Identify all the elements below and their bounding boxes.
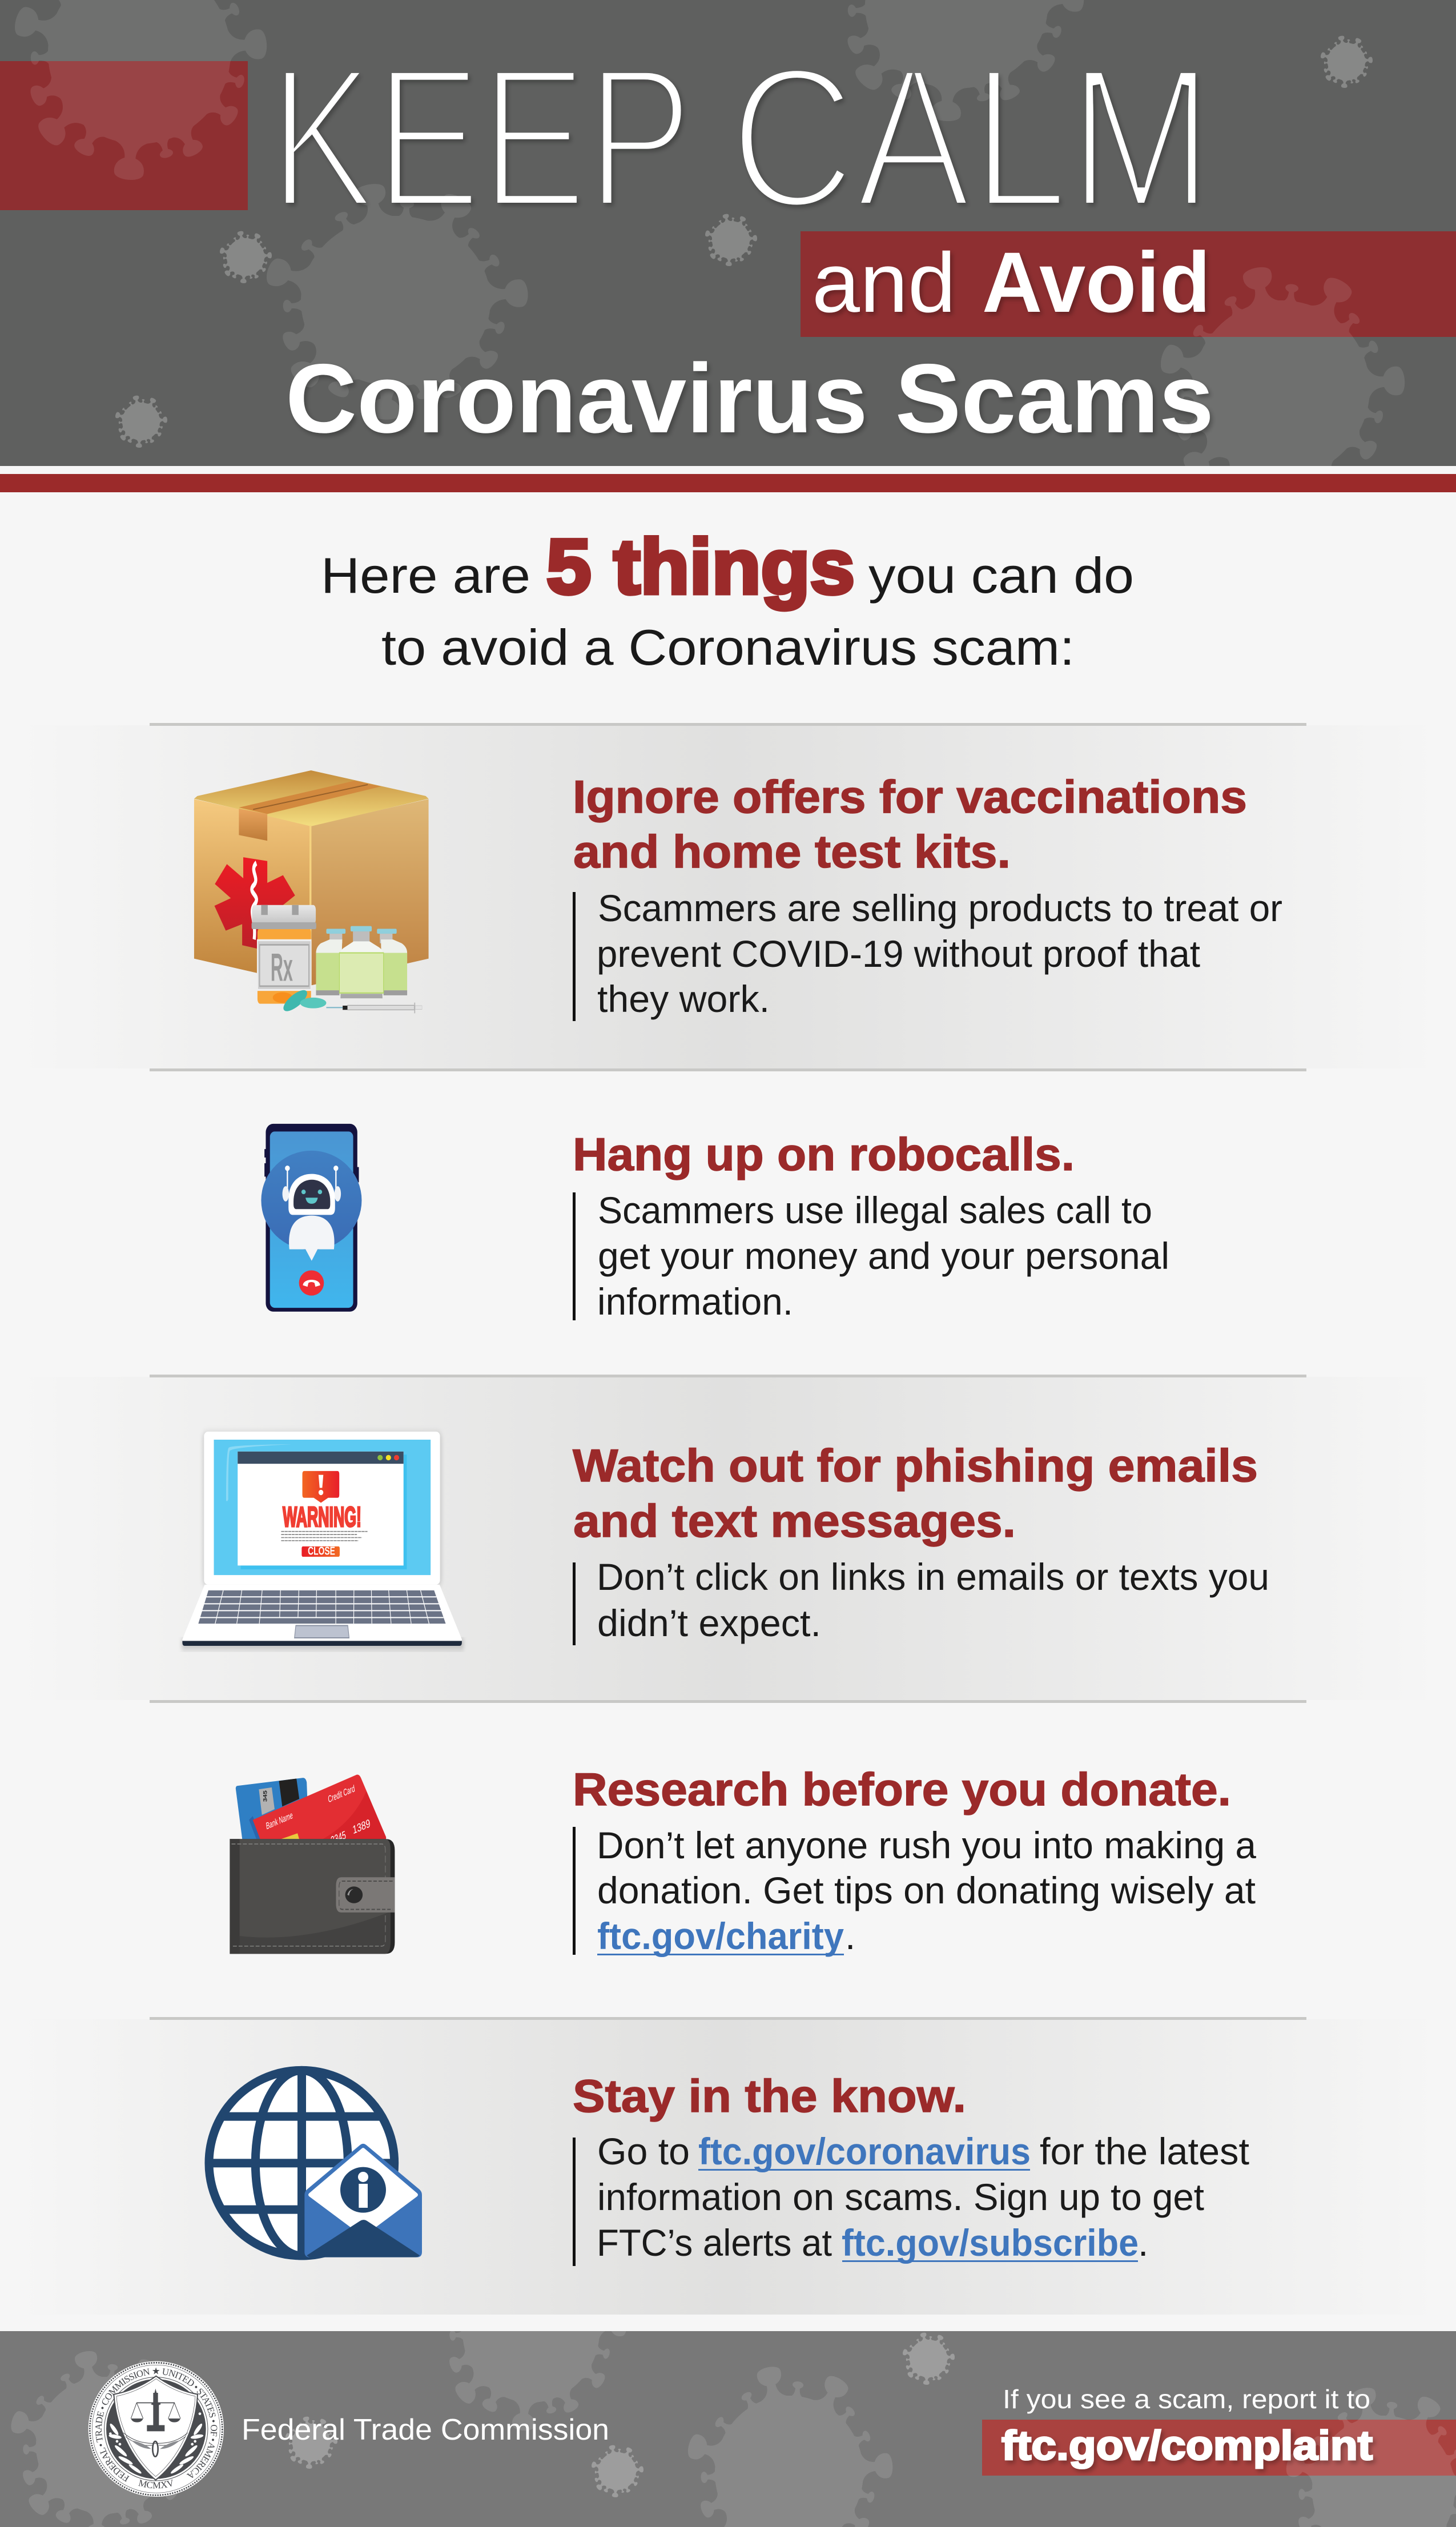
panel 1: vaccinations and test kits — [11, 723, 1445, 1068]
FTC seal — [88, 2361, 224, 2497]
text: body — [573, 1189, 1169, 1323]
seal ring lettering: FEDERAL • TRADE • COMMISSION ★ UNITED • STATES • OF • AMERICA — [95, 2368, 217, 2482]
text: heading: Stay in the know. — [573, 2071, 966, 2122]
text: body — [573, 887, 1282, 1021]
text: body — [573, 1556, 1269, 1645]
panel 2: robocalls — [150, 1068, 1306, 1323]
intro heading: Here are — [321, 547, 530, 604]
card label: bank name: Bank Name — [266, 1810, 293, 1831]
text: body — [573, 1824, 1256, 1957]
text: body: didn’t expect. — [597, 1602, 821, 1644]
seal ring lettering: MCMXV — [138, 2480, 173, 2489]
intro heading: to avoid a Coronavirus scam: — [381, 619, 1075, 676]
report prompt: If you see a scam, report it to — [1003, 2384, 1370, 2414]
title: KEEP CALM: CALM — [730, 25, 1213, 250]
text: heading — [573, 1440, 1258, 1547]
text: heading: and text messages. — [573, 1496, 1016, 1547]
intro heading — [321, 523, 1134, 676]
text: body: ftc.gov/subscribe — [842, 2221, 1139, 2264]
icon: wallet with cards: 2345 — [330, 1829, 347, 1847]
text: body: information. — [597, 1280, 793, 1323]
intro heading: 5 things — [546, 523, 855, 610]
Rx label: Rx — [271, 945, 293, 989]
card label: credit card: Credit Card — [327, 1783, 355, 1805]
warning label: WARNING! — [283, 1501, 361, 1533]
text: heading: and home test kits. — [573, 826, 1011, 878]
text: body: ftc.gov/charity — [597, 1915, 844, 1957]
text: body: ftc.gov/coronavirus — [698, 2130, 1031, 2172]
text: body: Don’t let anyone rush you into making a — [597, 1824, 1256, 1866]
report link: ftc.gov/complaint — [1001, 2423, 1373, 2469]
panel 4: donations — [150, 1700, 1306, 1957]
background viruses — [11, 0, 1406, 514]
text: heading: Research before you donate. — [573, 1764, 1231, 1815]
icon: globe with info envelope — [209, 2070, 422, 2257]
text: body: for the latest — [1040, 2130, 1249, 2172]
card number: 345 — [262, 1790, 268, 1802]
footer viruses — [11, 2331, 1456, 2527]
intro heading: you can do — [868, 547, 1134, 604]
icon: medical box with pills and vials — [194, 770, 429, 1015]
text: body: Don’t click on links in emails or texts you — [597, 1556, 1269, 1598]
text: body: prevent COVID-19 without proof that — [597, 933, 1200, 975]
title: KEEP CALM — [285, 71, 1199, 209]
report box — [982, 2420, 1456, 2476]
red accent block left — [0, 61, 248, 210]
text: body: donation. Get tips on donating wisely at — [597, 1869, 1256, 1911]
text: body: Go to — [597, 2130, 690, 2172]
panel 5: stay in the know — [11, 2017, 1445, 2315]
text: body: Scammers are selling products to treat or — [598, 887, 1282, 929]
title: and Avoid — [812, 234, 1210, 330]
text: body: . — [845, 1915, 855, 1957]
title: KEEP CALM: KEEP — [270, 25, 693, 250]
text: body — [573, 2130, 1249, 2266]
panel 3: phishing — [11, 1375, 1445, 1700]
text: heading: Hang up on robocalls. — [573, 1129, 1075, 1180]
Federal Trade Commission label: Federal Trade Commission — [242, 2413, 609, 2446]
close button label: CLOSE — [308, 1545, 335, 1558]
icon: wallet with cards — [230, 1775, 395, 1954]
footer — [0, 2331, 1456, 2527]
text: body: get your money and your personal — [598, 1235, 1169, 1277]
title: Coronavirus Scams: Coronavirus Scams — [285, 344, 1214, 453]
text: heading: Ignore offers for vaccinations — [573, 772, 1247, 823]
icon: laptop with warning — [182, 1432, 464, 1650]
text: body: information on scams. Sign up to get — [597, 2176, 1204, 2218]
red rule — [0, 474, 1456, 492]
text: heading: Watch out for phishing emails — [573, 1440, 1258, 1492]
title: and Avoid: and — [812, 236, 956, 330]
icon: phone with robot — [261, 1124, 361, 1312]
title: and Avoid: Avoid — [982, 234, 1210, 330]
red accent block right — [801, 231, 1456, 337]
card number: 1389 — [352, 1817, 371, 1837]
text: body: FTC’s alerts at — [597, 2221, 832, 2264]
header banner — [0, 0, 1456, 514]
text: body: they work. — [597, 978, 770, 1020]
text: body: . — [1138, 2221, 1148, 2264]
text: body: Scammers use illegal sales call to — [598, 1189, 1152, 1231]
text: heading — [573, 772, 1247, 878]
